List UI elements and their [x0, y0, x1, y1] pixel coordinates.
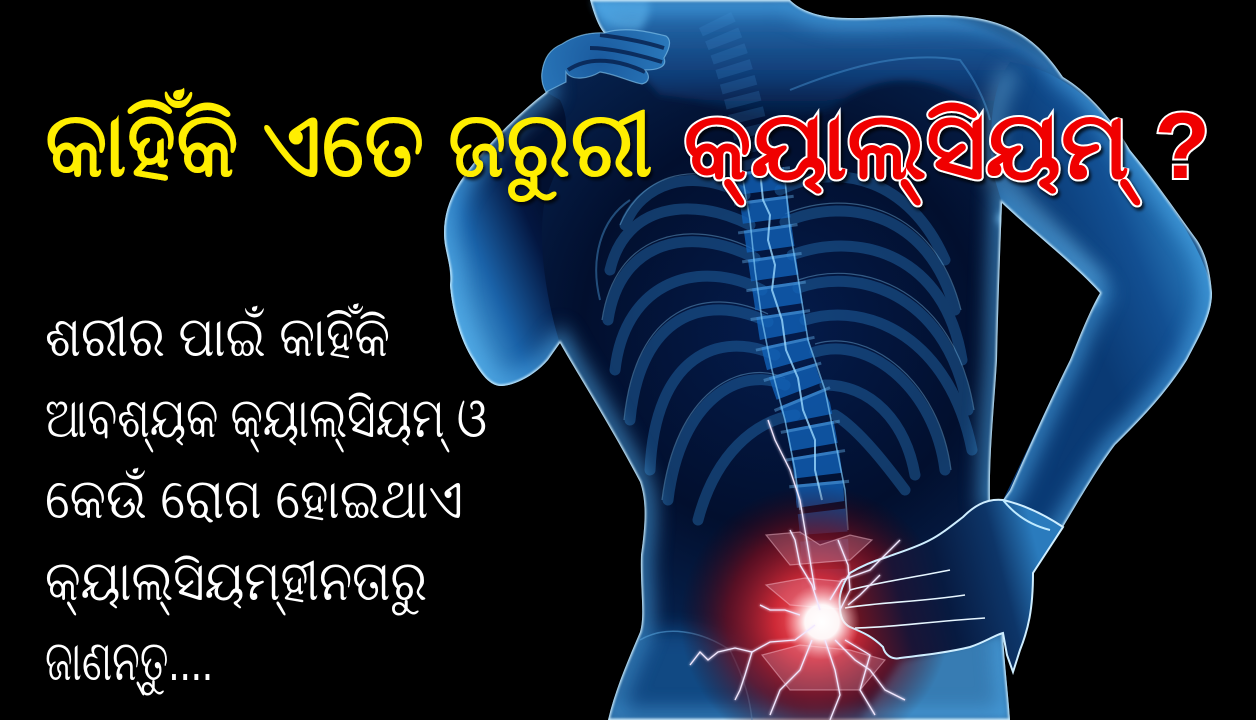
line 1: ଶରୀର ପାଇଁ କାହିଁକି: [45, 302, 390, 368]
torso silhouette: [444, 0, 1212, 720]
line 3: କେଉଁ ରୋଗ ହୋଇଥାଏ: [45, 467, 463, 530]
shoulder blade outline: [596, 57, 990, 300]
human back figure: [444, 0, 1212, 720]
line 2: ଆବଶ୍ୟକ କ୍ୟାଲ୍‌ସିୟମ୍ ଓ: [45, 386, 487, 452]
title part: yellow question: କାହିଁକି ଏତେ ଜରୁରୀ: [45, 89, 653, 202]
left arm: [444, 92, 566, 386]
right arm highlight: [992, 70, 1100, 303]
rib cage: [608, 177, 972, 520]
pain core: [784, 584, 860, 660]
upper back shading: [590, 0, 1061, 116]
right arm: [991, 62, 1212, 527]
hip shading: [608, 629, 790, 720]
title part: red calcium: କ୍ୟାଲ୍‌ସିୟମ୍ ?: [684, 93, 1210, 206]
lumbar vertebrae in pain zone: [762, 532, 885, 690]
body text: [45, 302, 487, 695]
line 5: ଜାଣନ୍ତୁ....: [45, 629, 213, 695]
body edge glow: [444, 0, 1212, 720]
line 4: କ୍ୟାଲ୍‌ସିୟମ୍‌ହୀନତାରୁ: [45, 549, 427, 615]
title: [45, 89, 1210, 206]
right hand on lower back: [839, 500, 1063, 672]
spine: [743, 170, 848, 640]
neck highlight: [592, 0, 649, 30]
lightning bolts: [690, 420, 905, 720]
neck vertebrae: [715, 20, 760, 170]
pelvis outline: [640, 631, 752, 720]
pain glow: [680, 485, 950, 720]
left hand on shoulder: [542, 30, 670, 92]
